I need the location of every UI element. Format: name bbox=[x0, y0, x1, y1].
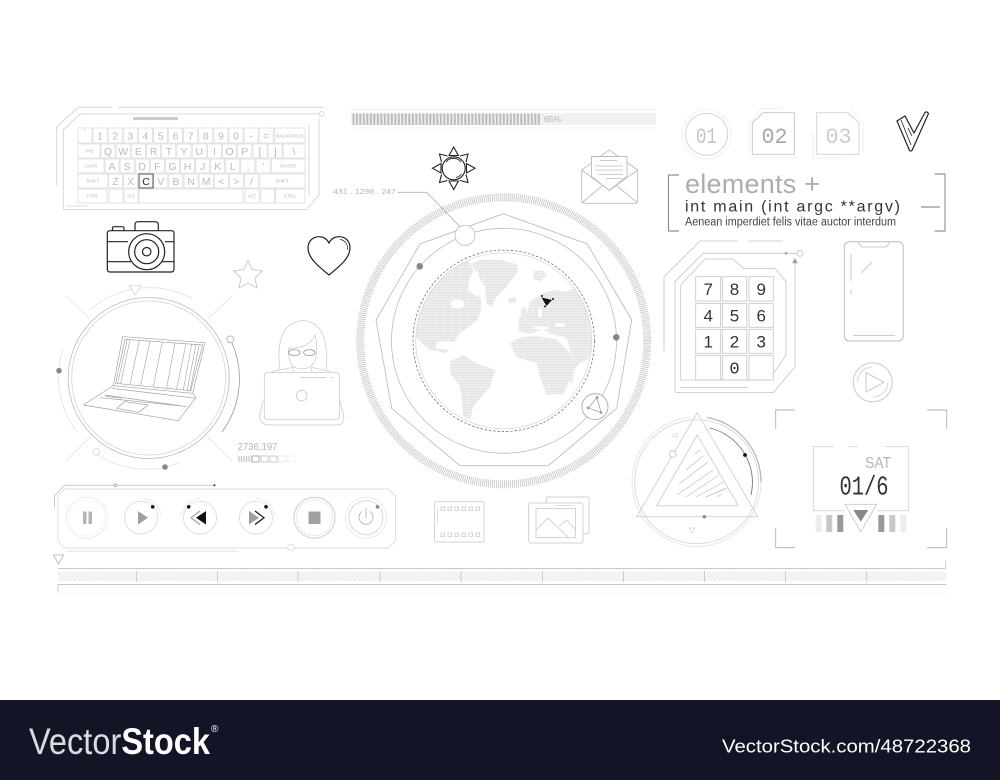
controls frame bbox=[54, 484, 396, 551]
badge: 01 bbox=[682, 110, 731, 159]
keyboard large legends: W bbox=[118, 146, 128, 158]
card outline bbox=[813, 447, 908, 511]
icon: film strip bbox=[434, 502, 484, 542]
continents bbox=[413, 259, 597, 419]
button: stop bbox=[294, 497, 335, 538]
orbit marker dots bbox=[416, 263, 620, 341]
keyboard small legends: TAB bbox=[85, 148, 93, 154]
panel: keyboard bbox=[57, 107, 324, 210]
keyboard large legends: 6 bbox=[173, 130, 179, 142]
keyboard small legends: BACKSPACE bbox=[276, 134, 304, 138]
panel: heading block bbox=[668, 169, 945, 231]
filled ticks bbox=[352, 114, 540, 125]
keypad digits: 1 bbox=[703, 332, 713, 352]
icon: camera bbox=[107, 222, 174, 272]
keyboard small legends: CTRL bbox=[86, 194, 99, 198]
dial markers bbox=[56, 286, 234, 470]
keyboard large legends: H bbox=[184, 161, 191, 173]
icon: heart bbox=[308, 237, 350, 275]
keyboard large legends: S bbox=[124, 161, 131, 173]
footer banner bbox=[0, 700, 1000, 780]
keyboard large legends: ` bbox=[83, 128, 87, 140]
keypad digits: 7 bbox=[703, 280, 713, 299]
triangle marker bbox=[845, 504, 877, 532]
keyboard large legends: T bbox=[166, 146, 173, 158]
keyboard large legends: Q bbox=[104, 146, 112, 158]
keyboard large legends: V bbox=[157, 176, 164, 188]
icon: woman at laptop bbox=[260, 321, 344, 425]
button: play bbox=[124, 498, 161, 534]
keyboard large legends: 8 bbox=[203, 130, 209, 142]
keyboard large legends bbox=[83, 128, 296, 188]
keyboard large legends: A bbox=[108, 161, 116, 173]
keyboard large legends: G bbox=[168, 161, 176, 173]
keyboard large legends: E bbox=[135, 146, 142, 158]
day label: SAT bbox=[865, 455, 891, 472]
keypad digits: 5 bbox=[730, 306, 739, 326]
keyboard large legends: O bbox=[226, 146, 234, 158]
dial rings bbox=[68, 298, 229, 458]
keyboard large legends: [ bbox=[259, 146, 262, 158]
keypad frame bbox=[664, 241, 803, 392]
keyboard large legends: C bbox=[142, 176, 150, 188]
keyboard large legends: J bbox=[200, 161, 205, 173]
icon: laptop bbox=[83, 337, 205, 421]
keyboard large legends: X bbox=[127, 176, 134, 188]
radar rings bbox=[632, 417, 761, 546]
caption: Aenean imperdiet felis vitae auctor interdum bbox=[685, 216, 896, 228]
location marker bbox=[541, 295, 554, 308]
keyboard large legends: Z bbox=[112, 176, 119, 188]
badge: 02 bbox=[749, 108, 798, 158]
keyboard frame bbox=[57, 107, 324, 210]
keyboard large legends: R bbox=[150, 146, 158, 158]
keypad digits: 8 bbox=[730, 280, 739, 299]
button: fast forward bbox=[240, 498, 275, 534]
keypad digits: 3 bbox=[756, 332, 766, 352]
tick separators bbox=[352, 114, 540, 125]
keyboard large legends: \ bbox=[293, 146, 296, 158]
keyboard small legends: SHIFT bbox=[275, 178, 289, 184]
keyboard large legends: 3 bbox=[127, 130, 133, 142]
keyboard large legends: 2 bbox=[112, 130, 118, 142]
keypad digits: 2 bbox=[730, 332, 739, 352]
button: pause bbox=[66, 497, 108, 538]
keypad keys bbox=[696, 277, 773, 380]
keyboard keys bbox=[78, 128, 305, 203]
hatched strip bbox=[58, 572, 946, 581]
progress bar bbox=[351, 110, 656, 128]
keyboard large legends: 7 bbox=[188, 130, 194, 142]
timeline bbox=[54, 555, 946, 594]
keyboard large legends: P bbox=[241, 146, 248, 158]
icon: star bbox=[234, 260, 262, 288]
registered mark: ® bbox=[211, 724, 219, 735]
callout: coordinates bbox=[333, 187, 475, 245]
button: power bbox=[346, 497, 386, 538]
image id: VectorStock.com/48722368 bbox=[722, 736, 971, 756]
octagonal frame bbox=[376, 214, 632, 466]
keyboard large legends: 4 bbox=[142, 130, 148, 142]
icon: smartphone bbox=[844, 242, 903, 341]
keyboard large legends: N bbox=[187, 176, 195, 188]
icon: photo stack bbox=[528, 497, 589, 543]
dial arcs and ticks bbox=[58, 288, 232, 469]
keyboard large legends: 1 bbox=[97, 130, 103, 142]
keyboard large legends: U bbox=[195, 146, 203, 158]
keyboard large legends: B bbox=[172, 176, 179, 188]
logo: VectorStock bbox=[29, 721, 210, 762]
keyboard large legends: ] bbox=[274, 146, 277, 158]
keyboard small legends: ALT bbox=[248, 194, 256, 198]
bar track bbox=[351, 110, 656, 128]
keyboard large legends: 5 bbox=[158, 130, 164, 142]
dark right arc bbox=[222, 343, 239, 432]
date: 01/6 bbox=[840, 474, 888, 504]
corner brackets bbox=[776, 410, 947, 548]
keypad digits: 6 bbox=[756, 306, 766, 326]
brackets bbox=[668, 174, 945, 231]
panel: triangle radar bbox=[632, 413, 761, 546]
timeline marker bbox=[54, 555, 64, 564]
radar markers bbox=[669, 433, 747, 533]
keyboard small legends bbox=[85, 134, 304, 198]
keypad digits bbox=[703, 280, 766, 380]
keyboard large legends: K bbox=[214, 161, 221, 173]
icon: sun bbox=[432, 147, 475, 190]
keyboard small legends: ENTER bbox=[280, 164, 296, 168]
keyboard large legends: Y bbox=[180, 146, 188, 158]
keyboard large legends: F bbox=[154, 161, 161, 173]
badge: 03 bbox=[813, 108, 863, 158]
keyboard small legends: CTRL bbox=[284, 194, 296, 198]
keyboard large legends: I bbox=[213, 146, 216, 158]
progress squares bbox=[239, 456, 295, 462]
keyboard large legends: 0 bbox=[233, 130, 239, 142]
heading: elements + bbox=[685, 169, 820, 199]
panel: globe bbox=[333, 187, 647, 484]
keyboard large legends: > bbox=[233, 176, 239, 188]
code line: int main (int argc **argv) bbox=[685, 198, 900, 216]
keyboard large legends: L bbox=[230, 161, 236, 173]
keyboard large legends: D bbox=[138, 161, 146, 173]
panel: keypad bbox=[664, 241, 803, 392]
callout: coordinates: 431 . 1298 . 247 bbox=[333, 187, 396, 196]
badge: 02: 02 bbox=[762, 125, 788, 150]
keypad digits: 4 bbox=[703, 306, 713, 326]
keyboard large legends: - bbox=[249, 130, 253, 142]
network badge bbox=[582, 394, 608, 420]
icon: check mark bbox=[897, 112, 928, 151]
timeline rails bbox=[58, 561, 946, 594]
badge: 03: 03 bbox=[826, 125, 852, 150]
badge: 01: 01 bbox=[696, 125, 717, 150]
map water details bbox=[450, 270, 565, 330]
radar triangles bbox=[637, 413, 758, 517]
keypad digits: 0 bbox=[729, 360, 740, 380]
hatched outer ring bbox=[360, 197, 647, 484]
keypad digits: 9 bbox=[756, 280, 766, 299]
keyboard small legends: ALT bbox=[127, 194, 135, 198]
orbit ring bbox=[392, 228, 616, 453]
label: 65%: 65% bbox=[544, 114, 561, 124]
icon: envelope bbox=[582, 150, 638, 203]
panel: laptop dial bbox=[56, 286, 239, 470]
triangle hatching bbox=[677, 450, 727, 497]
keyboard large legends: < bbox=[218, 176, 224, 188]
keyboard large legends: M bbox=[202, 176, 210, 188]
button: rewind bbox=[181, 498, 216, 534]
label: counter 2736,197: 2736,197 bbox=[238, 441, 278, 453]
keyboard large legends: 9 bbox=[218, 130, 224, 142]
icon: play badge bbox=[853, 363, 892, 402]
keyboard large legends: ' bbox=[262, 161, 264, 173]
keyboard small legends: CAPS bbox=[85, 164, 97, 168]
highlighted key C bbox=[139, 174, 153, 188]
side bars bbox=[816, 515, 906, 532]
panel: date card bbox=[776, 410, 947, 548]
keyboard large legends: ; bbox=[246, 161, 249, 173]
keyboard small legends: SHIFT bbox=[86, 178, 100, 184]
world map bbox=[413, 259, 597, 419]
keyboard large legends: / bbox=[250, 176, 253, 188]
dashed globe circle bbox=[413, 250, 594, 432]
panel: media controls bbox=[54, 484, 396, 551]
keyboard large legends: = bbox=[263, 130, 269, 142]
